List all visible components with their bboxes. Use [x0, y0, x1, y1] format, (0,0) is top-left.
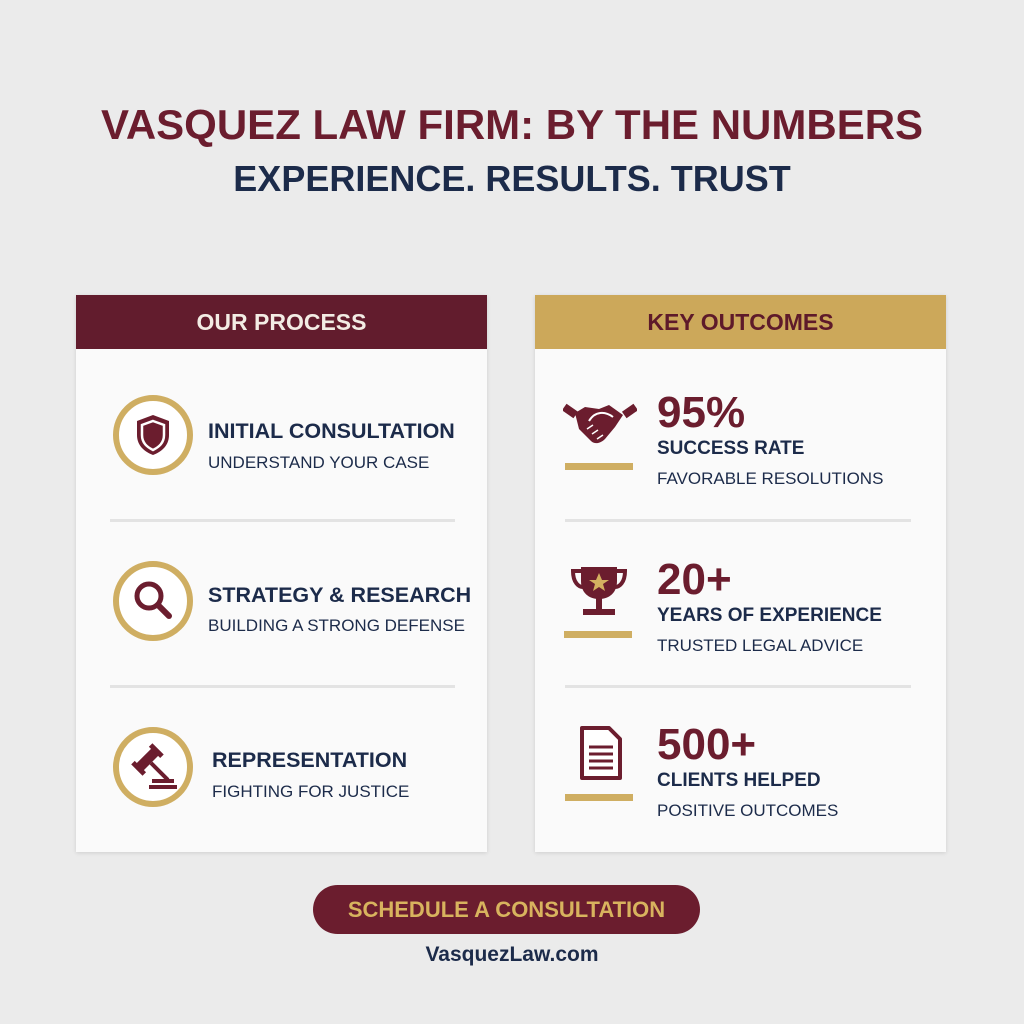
stat: 20+: TRUSTED LEGAL ADVICE [657, 636, 863, 655]
step: initial consultation: INITIAL CONSULTATION [208, 419, 455, 443]
step: strategy & research: STRATEGY & RESEARCH [208, 583, 471, 607]
panel header: our process: OUR PROCESS [196, 308, 366, 334]
button: schedule a consultation: SCHEDULE A CONSULTATION [348, 896, 665, 922]
stat: 95% [657, 388, 883, 488]
stat: 95%: FAVORABLE RESOLUTIONS [657, 469, 883, 488]
step: representation: REPRESENTATION [212, 748, 407, 772]
icon: document [580, 726, 622, 780]
stat: 500+: CLIENTS HELPED [657, 770, 821, 791]
step: strategy & research [208, 583, 471, 635]
icon: magnifier [113, 561, 193, 641]
website url: VasquezLaw.com [425, 943, 599, 966]
step: strategy & research: BUILDING A STRONG DEFENSE [208, 616, 465, 635]
step: representation [212, 748, 409, 801]
panel: key outcomes [535, 295, 946, 852]
icon: trophy [571, 567, 627, 615]
subtitle: EXPERIENCE. RESULTS. TRUST [233, 158, 791, 199]
stat: 500+: 500+ [657, 720, 756, 769]
stat: 95%: SUCCESS RATE [657, 438, 804, 459]
title: VASQUEZ LAW FIRM: BY THE NUMBERS [101, 101, 923, 148]
stat: 500+ [657, 720, 838, 820]
step: initial consultation [208, 419, 455, 472]
stat: 20+: YEARS OF EXPERIENCE [657, 605, 882, 626]
panel header: key outcomes: KEY OUTCOMES [647, 308, 834, 334]
panel header: key outcomes [535, 295, 946, 349]
panel: our process [76, 295, 487, 852]
icon: shield [113, 395, 193, 475]
panel header: our process [76, 295, 487, 349]
stat: 20+ [657, 555, 882, 655]
step: representation: FIGHTING FOR JUSTICE [212, 782, 409, 801]
icon: handshake [563, 404, 637, 444]
step: initial consultation: UNDERSTAND YOUR CASE [208, 453, 429, 472]
stat: 95%: 95% [657, 388, 745, 437]
icon: gavel [113, 727, 193, 807]
button: schedule a consultation [313, 885, 700, 934]
stat: 20+: 20+ [657, 555, 732, 604]
stat: 500+: POSITIVE OUTCOMES [657, 801, 838, 820]
